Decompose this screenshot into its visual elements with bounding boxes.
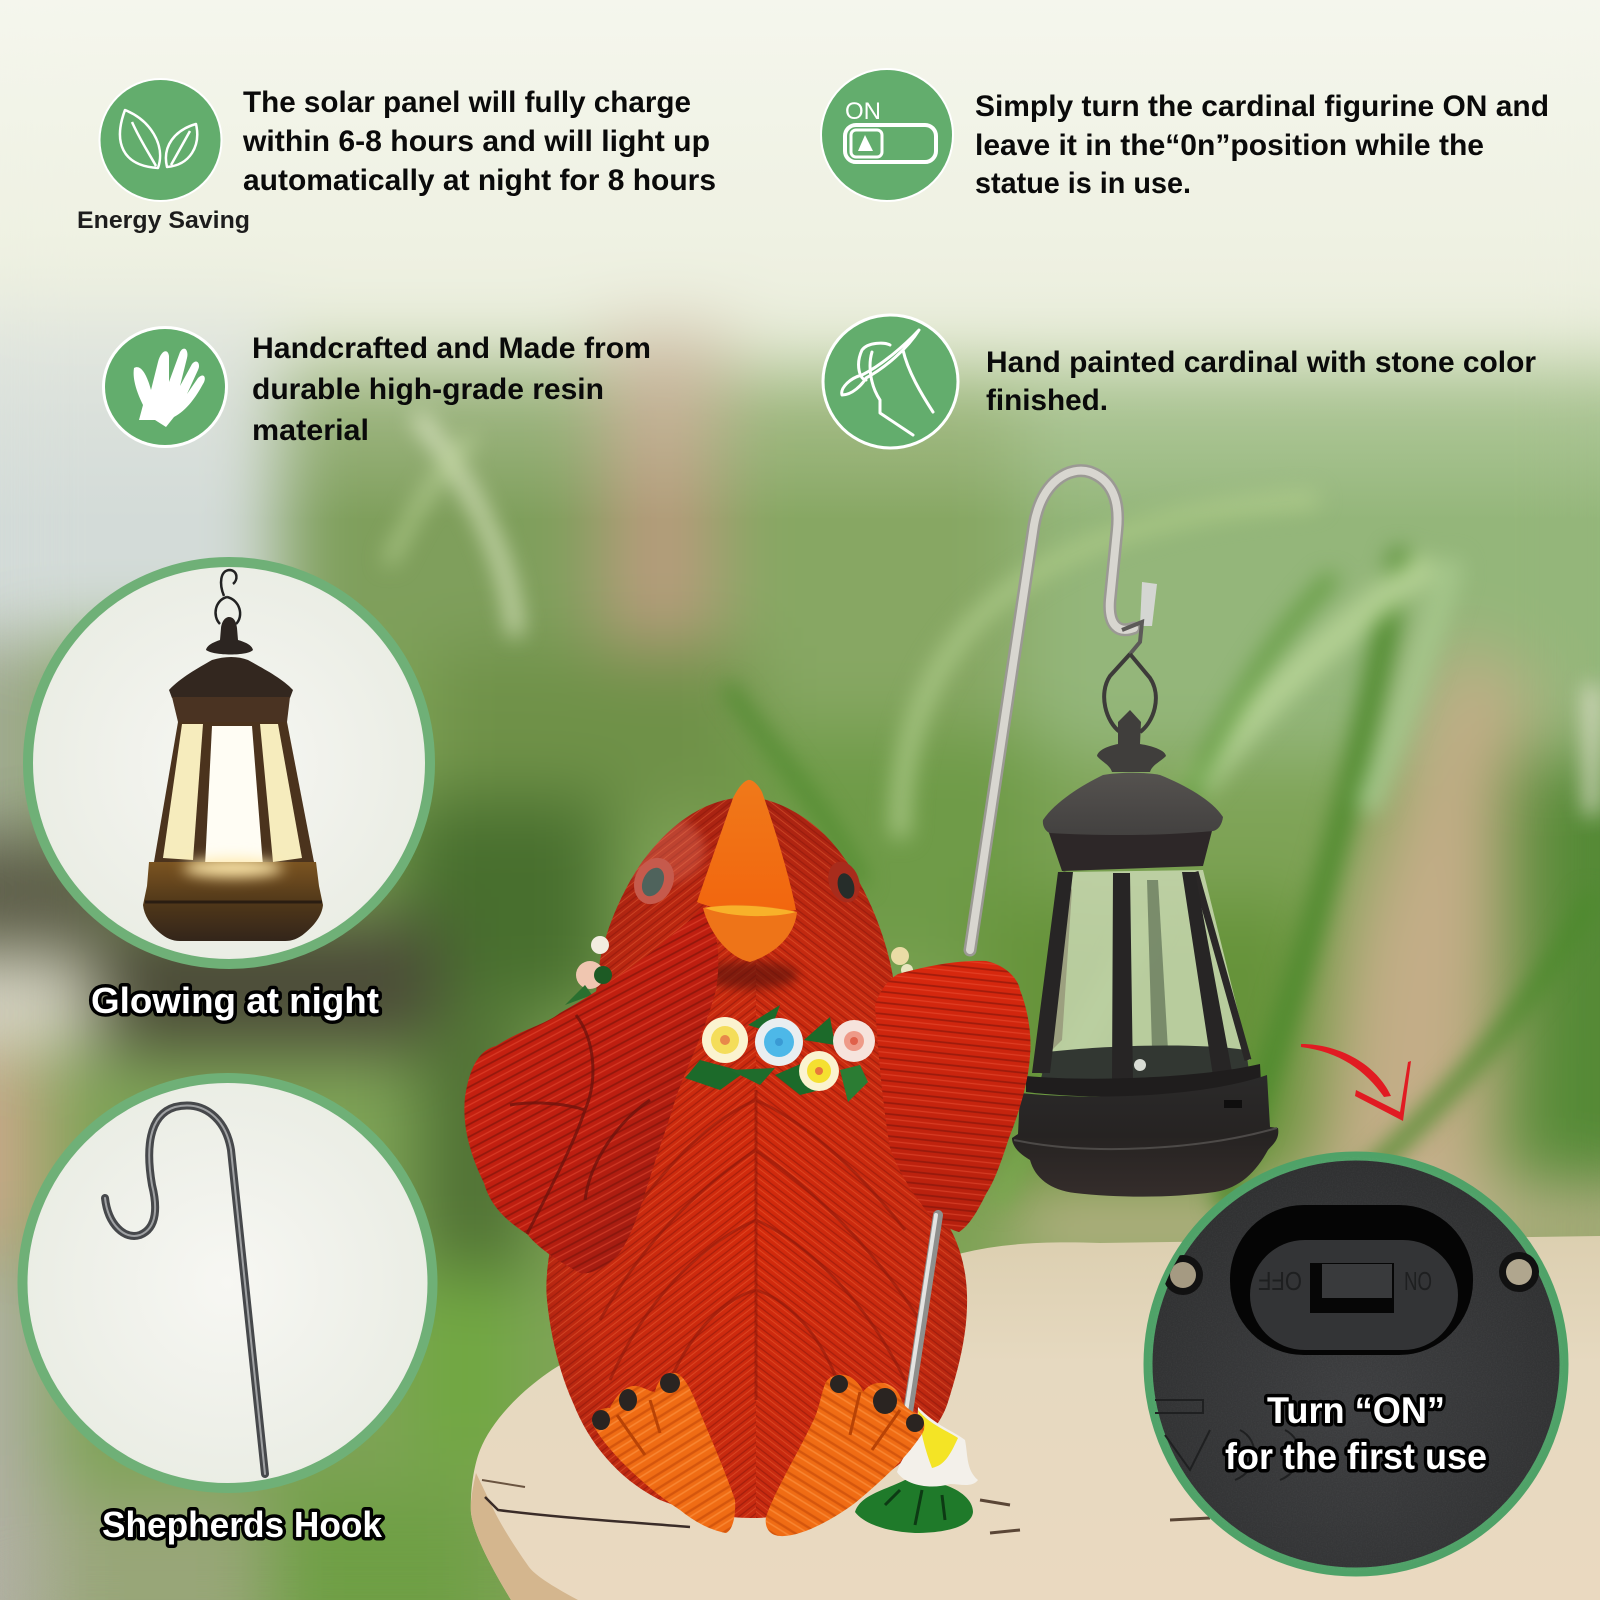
- plant at foot: [855, 1478, 973, 1533]
- engraved off and on: [1259, 1272, 1431, 1290]
- right foot: [766, 1375, 924, 1536]
- lantern base: [1012, 1064, 1278, 1197]
- text: solar charging: [242, 86, 716, 197]
- lantern bars: [1040, 872, 1248, 1073]
- pole in front of wing: [906, 1215, 938, 1412]
- callout: energy saving: [77, 78, 716, 234]
- figurine: cardinal: [464, 780, 1031, 1540]
- lantern dome: [1043, 773, 1223, 871]
- right wing: [875, 961, 1031, 1232]
- wooden table top: [471, 1236, 1600, 1600]
- label: energy saving: Energy Saving: [77, 207, 250, 234]
- text: turn on instructions: statue is in use.: [975, 167, 1191, 200]
- label: turn on: Turn “ON”: [1267, 1390, 1445, 1431]
- shepherds hook pole behind figurine: [970, 471, 1134, 950]
- lantern finial: [1097, 710, 1166, 772]
- label: glowing at night: Glowing at night: [91, 980, 379, 1021]
- beak: [697, 780, 797, 962]
- white and yellow flower: [897, 1407, 978, 1487]
- side flowers: [565, 936, 913, 1005]
- icon: on switch: ON: [845, 98, 881, 125]
- panel: glowing lantern: [28, 562, 430, 964]
- lantern clip: [1122, 582, 1157, 654]
- text: turn on instructions: leave it in the“0n”position while the: [975, 129, 1484, 162]
- left wing: [464, 907, 718, 1273]
- text: resin material: [252, 332, 651, 447]
- icon: on switch: [820, 68, 954, 202]
- text: solar charging: automatically at night for 8 hours: [243, 164, 716, 197]
- panel: on switch detail: [1140, 1150, 1570, 1580]
- hanging lantern: [1012, 582, 1278, 1197]
- label: first use: for the first use: [1225, 1436, 1487, 1477]
- text: hand painted: Hand painted cardinal with stone color: [986, 346, 1536, 379]
- lantern glass: [1040, 870, 1250, 1082]
- text: resin material: durable high-grade resin: [252, 373, 604, 406]
- engraved off and on: OFF: [1258, 1266, 1302, 1296]
- label: shepherds hook: Shepherds Hook: [102, 1504, 383, 1545]
- text: turn on instructions: [975, 90, 1549, 200]
- callout: on switch: [820, 68, 1549, 202]
- screws: [1163, 1252, 1539, 1295]
- text: hand painted: finished.: [986, 384, 1108, 417]
- callout: hand painted: [822, 314, 1536, 450]
- switch knob: [1310, 1263, 1394, 1313]
- text: resin material: material: [252, 414, 369, 447]
- icon: hand with brush: [822, 314, 960, 450]
- flower necklace: [685, 1005, 875, 1102]
- engraved off and on: ON: [1404, 1266, 1432, 1296]
- panel: shepherds hook: [22, 1078, 432, 1488]
- text: turn on instructions: Simply turn the cardinal figurine ON and: [975, 90, 1549, 123]
- icon: glove: [102, 326, 228, 448]
- icon: glowing lantern: [143, 570, 323, 941]
- text: solar charging: The solar panel will fully charge: [243, 86, 691, 119]
- arrow: [1301, 1044, 1411, 1121]
- text: resin material: Handcrafted and Made from: [252, 332, 651, 365]
- text: hand painted: [986, 346, 1536, 417]
- bird eyes: [627, 851, 865, 911]
- icon: shepherds hook: [105, 1106, 265, 1474]
- callout: handcrafted: [102, 326, 651, 448]
- icon: leaves: [98, 78, 222, 202]
- bird body: [546, 798, 968, 1518]
- left foot: [592, 1373, 735, 1533]
- text: solar charging: within 6-8 hours and will light up: [242, 125, 710, 158]
